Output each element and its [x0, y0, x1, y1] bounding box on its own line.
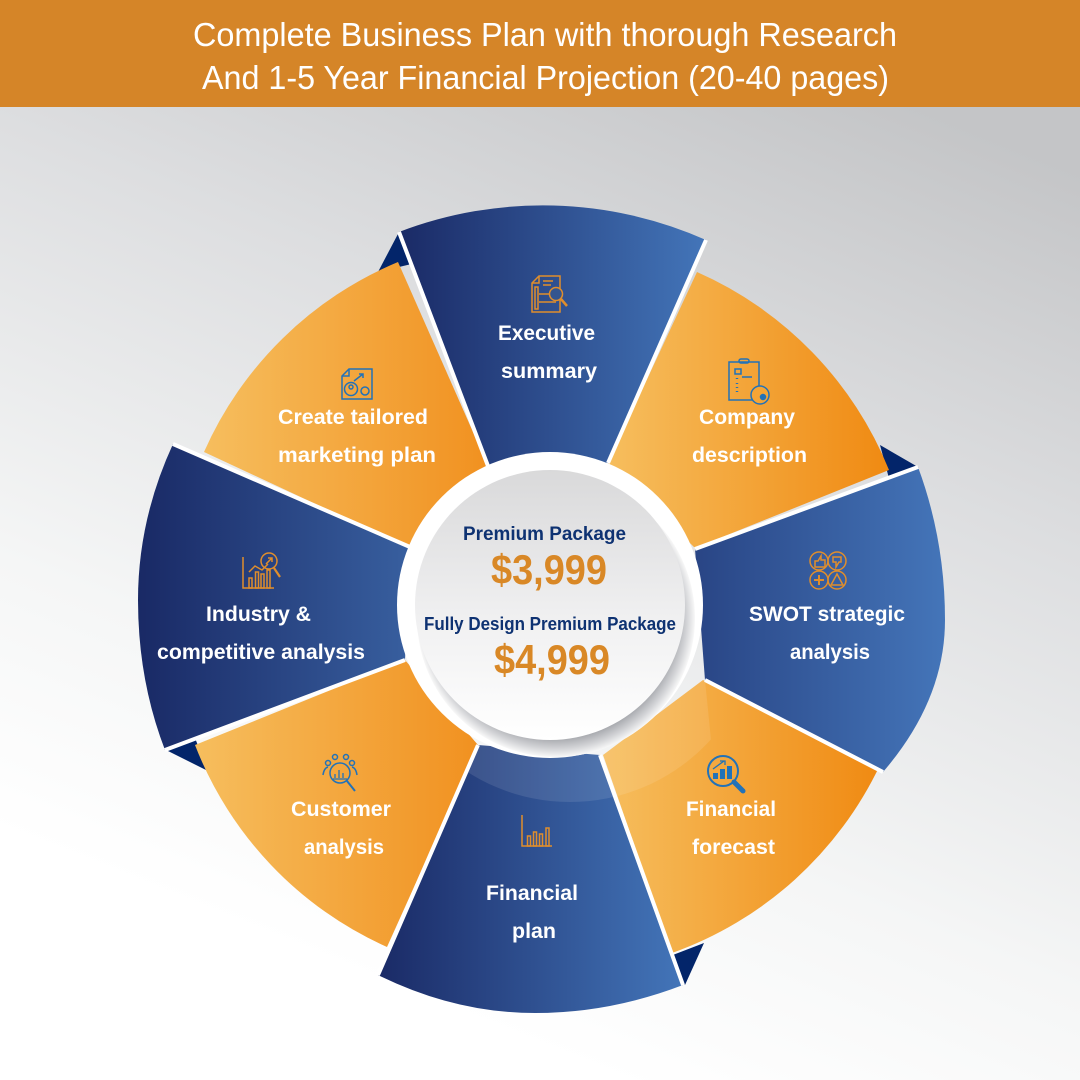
label: financial forecast: Financial [686, 798, 776, 821]
label: swot strategic analysis: analysis [790, 641, 870, 664]
label: industry and competitive analysis: competitive analysis [157, 641, 365, 664]
glow under hub [468, 680, 711, 802]
segment: company description [608, 272, 889, 548]
label: create tailored marketing plan [278, 406, 436, 467]
label: financial forecast: forecast [692, 836, 775, 859]
label: financial plan: plan [512, 920, 556, 943]
fully design premium package price: $4,999 [494, 636, 610, 683]
premium package price [463, 524, 626, 593]
navy accent triangles [166, 232, 918, 985]
header banner [0, 0, 1080, 107]
label: financial forecast [686, 798, 776, 859]
label: industry and competitive analysis [157, 603, 365, 664]
label: industry and competitive analysis: Industry & [206, 603, 311, 626]
label: create tailored marketing plan: marketing plan [278, 444, 436, 467]
icon: growth chart with magnifier [243, 553, 280, 588]
icon: swot four circles [810, 552, 846, 589]
segment: industry and competitive analysis [138, 444, 410, 750]
segment: create tailored marketing plan [204, 262, 488, 548]
label: create tailored marketing plan: Create tailored [278, 406, 428, 429]
header banner: And 1-5 Year Financial Projection (20-40 pages) [202, 59, 889, 96]
label: executive summary: Executive [498, 322, 595, 345]
label: financial plan: Financial [486, 882, 578, 905]
label: executive summary [498, 322, 597, 383]
segment: financial plan [378, 745, 683, 1013]
segment: financial forecast [603, 680, 880, 953]
label: company description [692, 406, 807, 467]
label: customer analysis: analysis [304, 836, 384, 859]
premium package price: $3,999 [491, 546, 607, 593]
segment: swot strategic analysis [695, 467, 945, 772]
label: customer analysis: Customer [291, 798, 391, 821]
fully design premium package price: Fully Design Premium Package [424, 614, 676, 634]
icon: bar chart [522, 815, 552, 846]
premium package price: Premium Package [463, 524, 626, 545]
center hub [397, 452, 703, 758]
segment: customer analysis [195, 660, 478, 947]
icon: magnifier with bars [708, 756, 743, 791]
segment: executive summary [399, 205, 706, 466]
icon: document with magnifier [532, 276, 567, 312]
icon: clipboard checklist [729, 359, 769, 404]
label: company description: description [692, 444, 807, 467]
header banner: Complete Business Plan with thorough Research [193, 16, 897, 53]
label: swot strategic analysis: SWOT strategic [749, 603, 905, 626]
label: executive summary: summary [501, 360, 597, 383]
fully design premium package price [424, 614, 676, 683]
label: customer analysis [291, 798, 391, 859]
label: financial plan [486, 882, 578, 943]
label: swot strategic analysis [749, 603, 905, 664]
label: company description: Company [699, 406, 795, 429]
icon: marketing document [342, 369, 372, 399]
icon: customer search [323, 754, 357, 791]
